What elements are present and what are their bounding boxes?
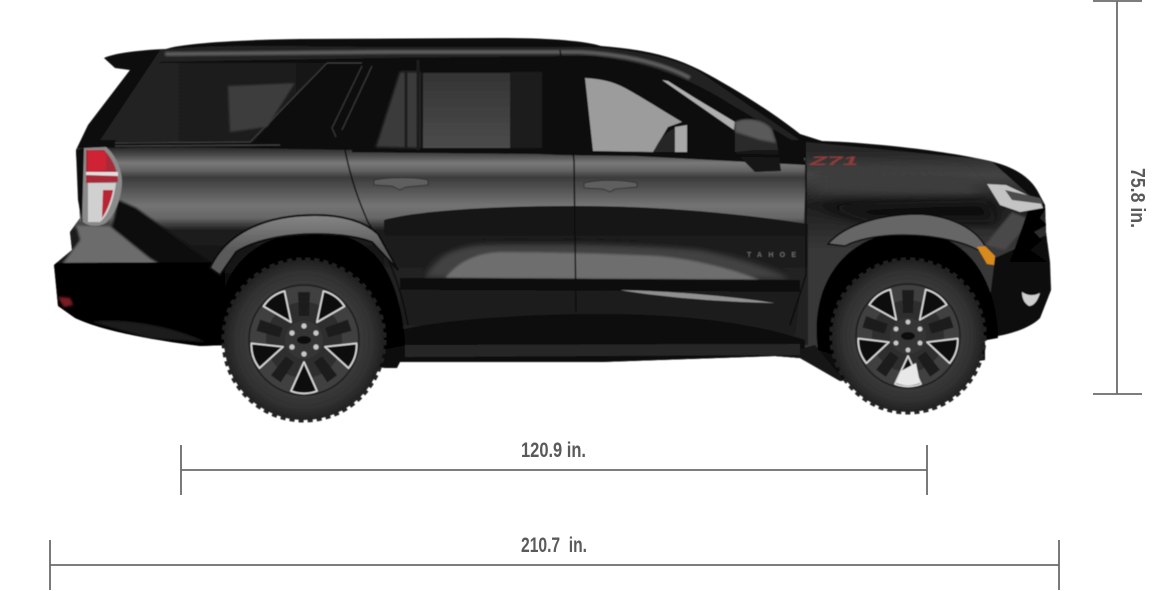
rim	[856, 284, 960, 388]
glass dark gradient	[510, 72, 542, 148]
front fender and hood	[800, 142, 1050, 350]
front door window	[585, 78, 682, 152]
rear fender flare	[210, 215, 398, 275]
rear door interior	[423, 73, 511, 148]
rear door glass	[376, 72, 420, 148]
rear bumper	[54, 262, 225, 346]
tire	[832, 260, 984, 412]
side panels	[54, 146, 805, 352]
height dimension	[1093, 1, 1148, 394]
rear wheel	[224, 260, 384, 420]
front door handle	[584, 180, 637, 192]
bright gaps	[896, 363, 920, 386]
rear door window frame	[331, 59, 546, 150]
side mirror	[735, 119, 781, 171]
roof band	[100, 46, 800, 140]
rear wheel arch	[219, 232, 405, 360]
rim	[249, 285, 359, 395]
fender dark sweep	[815, 200, 1000, 222]
bumper lower sheen	[92, 321, 205, 342]
overall length dimension	[50, 534, 1059, 590]
sill shadow	[400, 314, 805, 362]
rear quarter interior	[228, 83, 295, 132]
vehicle: black SUV side profile	[40, 30, 1060, 420]
hub and lug nuts	[890, 318, 926, 354]
window pillar lines	[406, 60, 418, 150]
front fender flare	[828, 214, 985, 250]
lower door shadow band	[400, 278, 800, 292]
running board	[405, 344, 800, 357]
rear quarter soft patch	[62, 225, 160, 264]
front bumper	[985, 235, 1051, 338]
front wheel	[832, 260, 984, 412]
body shell	[40, 30, 1060, 390]
spoke windows	[249, 289, 359, 394]
rear quarter window trim	[115, 63, 362, 143]
front wheel arch	[817, 232, 998, 360]
rear quarter dark band	[112, 200, 211, 264]
rear reflector	[58, 297, 73, 307]
headlight	[987, 184, 1043, 212]
belt line	[352, 151, 780, 156]
overall length label: 210.7 in.	[521, 534, 587, 557]
wheelbase label: 120.9 in.	[521, 439, 586, 462]
greenhouse	[122, 56, 806, 165]
grille notches	[1010, 205, 1047, 262]
rear quarter window	[115, 63, 327, 142]
hood shoulder highlight	[820, 188, 980, 208]
rocker panel tone	[400, 291, 800, 335]
door seams	[345, 50, 806, 325]
height label: 75.8 in.	[1126, 168, 1148, 228]
rocker sheen	[620, 290, 775, 303]
fog light chrome	[1022, 292, 1040, 306]
lower door dark wave	[384, 206, 808, 345]
door reflection soft edge	[425, 244, 790, 279]
dark pockets	[256, 292, 352, 382]
front bumper facet	[986, 212, 1026, 250]
under-body fairing	[775, 345, 845, 382]
spoke windows	[856, 288, 960, 386]
rear tail light	[76, 147, 122, 226]
amber marker	[977, 246, 995, 265]
rear door handle	[374, 178, 428, 190]
Z71 badge: Z71	[808, 154, 859, 168]
door reflection	[445, 252, 760, 280]
windshield sliver	[662, 80, 735, 130]
dark pockets	[862, 290, 954, 377]
model name: TAHOE	[747, 252, 796, 259]
tire	[224, 260, 384, 420]
hub and lug nuts	[285, 321, 323, 359]
wheelbase dimension	[181, 439, 927, 495]
front seat	[654, 125, 687, 152]
